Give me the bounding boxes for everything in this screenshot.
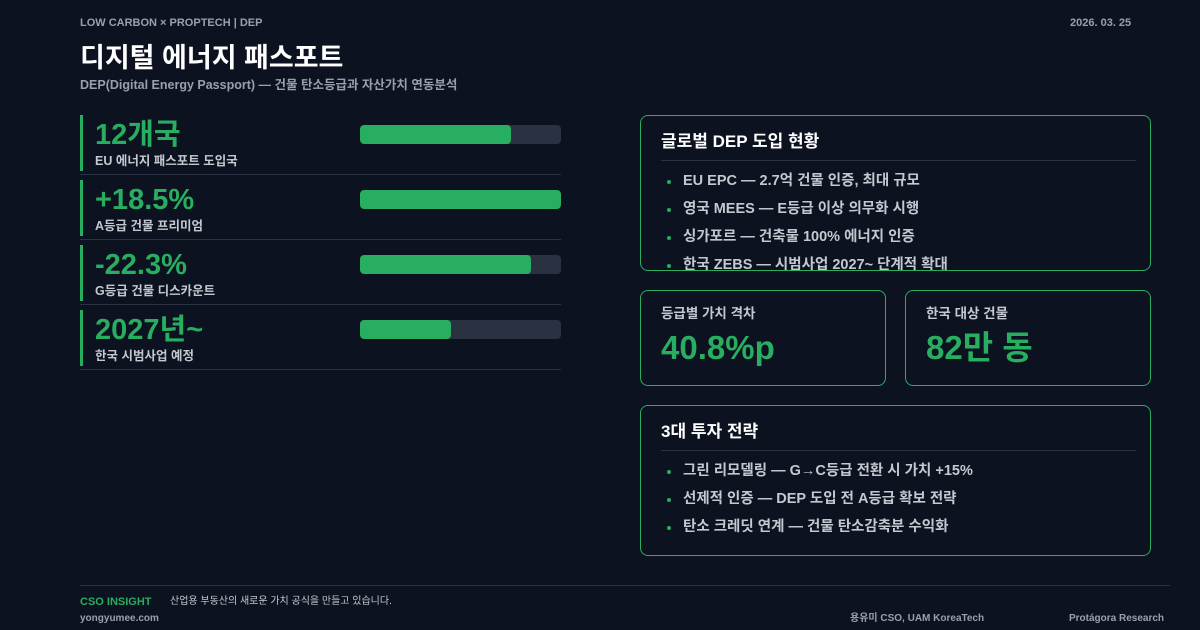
stat row: +18.5% [80, 180, 561, 240]
stat row: -22.3% [80, 245, 561, 305]
stat row: 12개국: 12개국 [95, 119, 181, 151]
panel: grade value gap: 40.8%p [661, 329, 775, 366]
panel: global DEP status: 글로벌 DEP 도입 현황 [661, 132, 819, 151]
stat row: 2027년~: 2027년~ [95, 314, 203, 346]
stat row: 2027년~ [80, 310, 561, 370]
panel: global DEP status: 싱가포르 — 건축물 100% 에너지 인증 [683, 229, 915, 245]
panel: global DEP status: 영국 MEES — E등급 이상 의무화 시행 [683, 201, 919, 217]
subtitle: DEP(Digital Energy Passport) — 건물 탄소등급과 자산가치 연동분석 [80, 78, 457, 92]
footer tagline: 산업용 부동산의 새로운 가치 공식을 만들고 있습니다. [170, 596, 392, 607]
panel: investment strategies: 3대 투자 전략 [661, 422, 758, 441]
stat row: 2027년~: 한국 시범사업 예정 [95, 349, 194, 363]
panel: grade value gap: 등급별 가치 격차 [661, 306, 755, 321]
top tag: LOW CARBON × PROPTECH | DEP [80, 17, 262, 29]
footer insight: CSO INSIGHT [80, 596, 152, 608]
panel: investment strategies: 선제적 인증 — DEP 도입 전 A등급 확보 전략 [683, 491, 957, 507]
stat row: 12개국 [80, 115, 561, 175]
stat row: -22.3%: G등급 건물 디스카운트 [95, 284, 215, 298]
date: 2026. 03. 25 [1070, 17, 1131, 29]
stat row: -22.3%: -22.3% [95, 249, 187, 281]
panel: Korean target buildings: 82만 동 [926, 329, 1033, 366]
title: 디지털 에너지 패스포트 [80, 43, 343, 73]
footer research: Protágora Research [1069, 613, 1164, 624]
stat row: +18.5%: A등급 건물 프리미엄 [95, 219, 203, 233]
panel: investment strategies [640, 405, 1151, 556]
panel: grade value gap [640, 290, 886, 386]
stat row: 12개국: EU 에너지 패스포트 도입국 [95, 154, 238, 168]
panel: global DEP status: EU EPC — 2.7억 건물 인증, 최대 규모 [683, 173, 920, 189]
panel: Korean target buildings [905, 290, 1151, 386]
panel: investment strategies: 그린 리모델링 — G→C등급 전환 시 가치 +15% [683, 463, 973, 479]
panel: investment strategies: 탄소 크레딧 연계 — 건물 탄소감축분 수익화 [683, 519, 948, 535]
footer author: 용유미 CSO, UAM KoreaTech [850, 613, 984, 624]
panel: Korean target buildings: 한국 대상 건물 [926, 306, 1008, 321]
stat row: +18.5%: +18.5% [95, 184, 194, 216]
panel: global DEP status [640, 115, 1151, 271]
footer site: yongyumee.com [80, 613, 159, 624]
